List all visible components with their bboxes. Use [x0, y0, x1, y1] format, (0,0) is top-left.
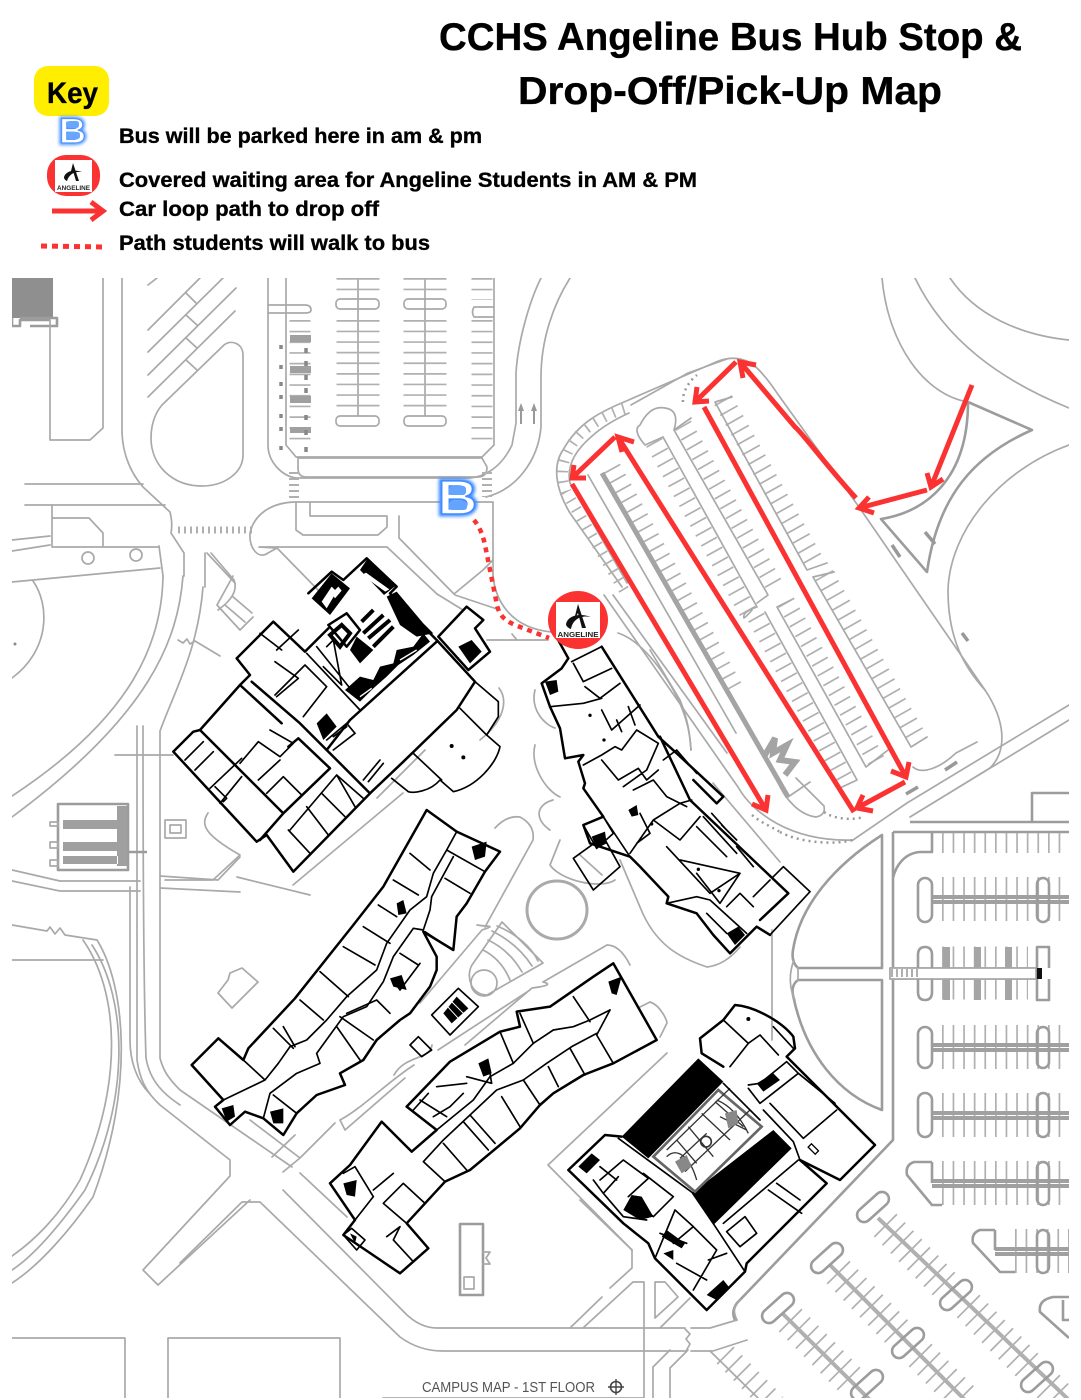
arrow: top turn [695, 362, 736, 402]
title [439, 16, 1022, 113]
building: small annex [410, 988, 478, 1057]
southeast diagonal parking [725, 1189, 1069, 1400]
parking stall rows [602, 397, 927, 797]
bus parked marker: B [438, 472, 477, 525]
title: CCHS Angeline Bus Hub Stop & [439, 16, 1022, 59]
north parking lot [268, 278, 570, 500]
icon: bus marker key: B [59, 112, 86, 151]
parking row 1 [918, 878, 1069, 922]
parking row 3 [918, 1027, 1069, 1068]
key text: bus: Bus will be parked here in am & pm [119, 124, 482, 148]
northeast wedge and curves [881, 278, 1069, 794]
bus parked marker: B [438, 472, 477, 525]
walking route underlay [493, 575, 552, 632]
key text: walking path: Path students will walk to bus [119, 231, 430, 255]
arrow: final aisle down [572, 484, 768, 810]
west athletic fields and service road [12, 576, 340, 1398]
map caption: CAMPUS MAP - 1ST FLOOR [422, 1380, 595, 1396]
arrow: second top turn [572, 437, 615, 478]
stall row: central west [654, 442, 848, 785]
east parking field [733, 793, 1069, 1338]
central lawns and amphitheater [165, 594, 795, 1130]
building: south-west long wing [192, 810, 500, 1135]
arrow: aisle down [704, 407, 909, 777]
stall row: northeast [723, 400, 919, 742]
arrow: along north-east [740, 362, 856, 498]
parking row 4 [918, 1093, 1069, 1137]
car loop arrows [572, 362, 972, 812]
northwest corner structure [12, 278, 103, 440]
building: south long wing [330, 963, 657, 1273]
key legend [34, 66, 697, 255]
west road and teardrop island [25, 278, 255, 576]
title: Drop-Off/Pick-Up Map [518, 70, 942, 113]
stall row: median west [612, 468, 735, 690]
building: north-east academic wing [542, 637, 810, 953]
entry drive shapes below lot [12, 502, 493, 630]
building: gymnasium [568, 1005, 875, 1310]
arrow: aisle up [618, 437, 854, 812]
arrow: entry turn [859, 490, 927, 513]
icon: walking path key [41, 246, 106, 247]
south road and walks [180, 1053, 760, 1400]
court [653, 1088, 762, 1192]
parking row 2 accessible [890, 947, 1049, 1000]
arrow: entry [927, 385, 972, 487]
Angeline covered waiting area marker [548, 591, 608, 649]
building: northwest main [173, 558, 500, 872]
icon: Angeline waiting area key [47, 155, 100, 196]
utility yard [50, 804, 147, 870]
Angeline covered waiting area marker: ANGELINE [558, 630, 598, 639]
site plan: roads and grounds [12, 278, 1069, 1400]
icon: Angeline waiting area key: ANGELINE [57, 185, 91, 192]
parking row 5 [907, 1162, 1069, 1205]
campus map [12, 278, 1069, 1400]
icon: car loop arrow key [52, 202, 103, 220]
walking path from bus to waiting area [474, 520, 549, 638]
icon: bus marker key: B [59, 112, 86, 151]
stall row: central east [683, 425, 877, 762]
arrow: bottom turn [857, 782, 905, 811]
key heading [34, 66, 109, 116]
bleachers [622, 1058, 792, 1225]
key text: car loop: Car loop path to drop off [119, 197, 380, 221]
key text: waiting area: Covered waiting area for Angeline Students in AM & PM [119, 168, 697, 192]
parking row 6 [973, 1230, 1069, 1273]
key heading: Key [47, 77, 98, 110]
east parking lot loop [557, 358, 1069, 843]
